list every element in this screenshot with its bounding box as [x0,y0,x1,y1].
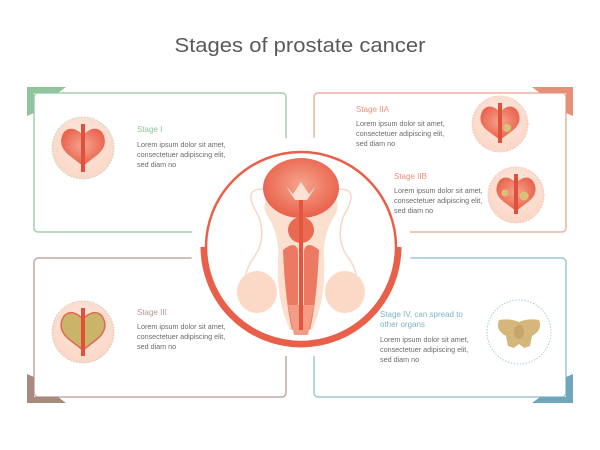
text: stage IV: Stage IV, can spread to [380,310,463,319]
text: stage IIB: Stage IIB [394,172,427,181]
panel: stage I [27,87,286,232]
text: stage III: Stage III [137,308,167,317]
panel: stage II [314,87,573,232]
text: stage IV: Lorem ipsum dolor sit amet, [380,335,469,344]
text: stage IV: other organs [380,320,425,329]
text: stage IIA: Stage IIA [356,105,390,114]
text: stage IIA [356,105,445,148]
text: stage IIB [394,172,483,215]
text: stage IIB: Lorem ipsum dolor sit amet, [394,186,483,195]
text: stage I: sed diam no [137,160,176,169]
icon: stage I prostate [52,117,114,179]
text: stage III [137,308,226,351]
text: stage I: consectetuer adipiscing elit, [137,150,225,159]
text: stage IV [380,310,469,364]
panel: stage IV [314,258,573,403]
text: stage IV: sed diam no [380,355,419,364]
icon: stage III prostate [52,301,114,363]
center anatomy illustration [203,152,399,345]
text: stage IV: consectetuer adipiscing elit, [380,345,468,354]
text: stage IIA: Lorem ipsum dolor sit amet, [356,119,445,128]
icon: pelvis [487,300,551,364]
text: stage IIA: sed diam no [356,139,395,148]
icon: stage IIA prostate [472,96,528,152]
icon: stage IIB prostate [488,167,544,223]
text: stage IIB: sed diam no [394,206,433,215]
panel: stage III [27,258,286,403]
text: stage III: sed diam no [137,342,176,351]
text: stage I: Lorem ipsum dolor sit amet, [137,140,226,149]
text: stage III: Lorem ipsum dolor sit amet, [137,322,226,331]
text: stage IIA: consectetuer adipiscing elit, [356,129,444,138]
title: Stages of prostate cancer [174,35,426,57]
white mask [191,137,411,357]
text: stage I [137,125,226,169]
text: stage III: consectetuer adipiscing elit, [137,332,225,341]
text: stage IIB: consectetuer adipiscing elit, [394,196,482,205]
text: stage I: Stage I [137,125,162,134]
